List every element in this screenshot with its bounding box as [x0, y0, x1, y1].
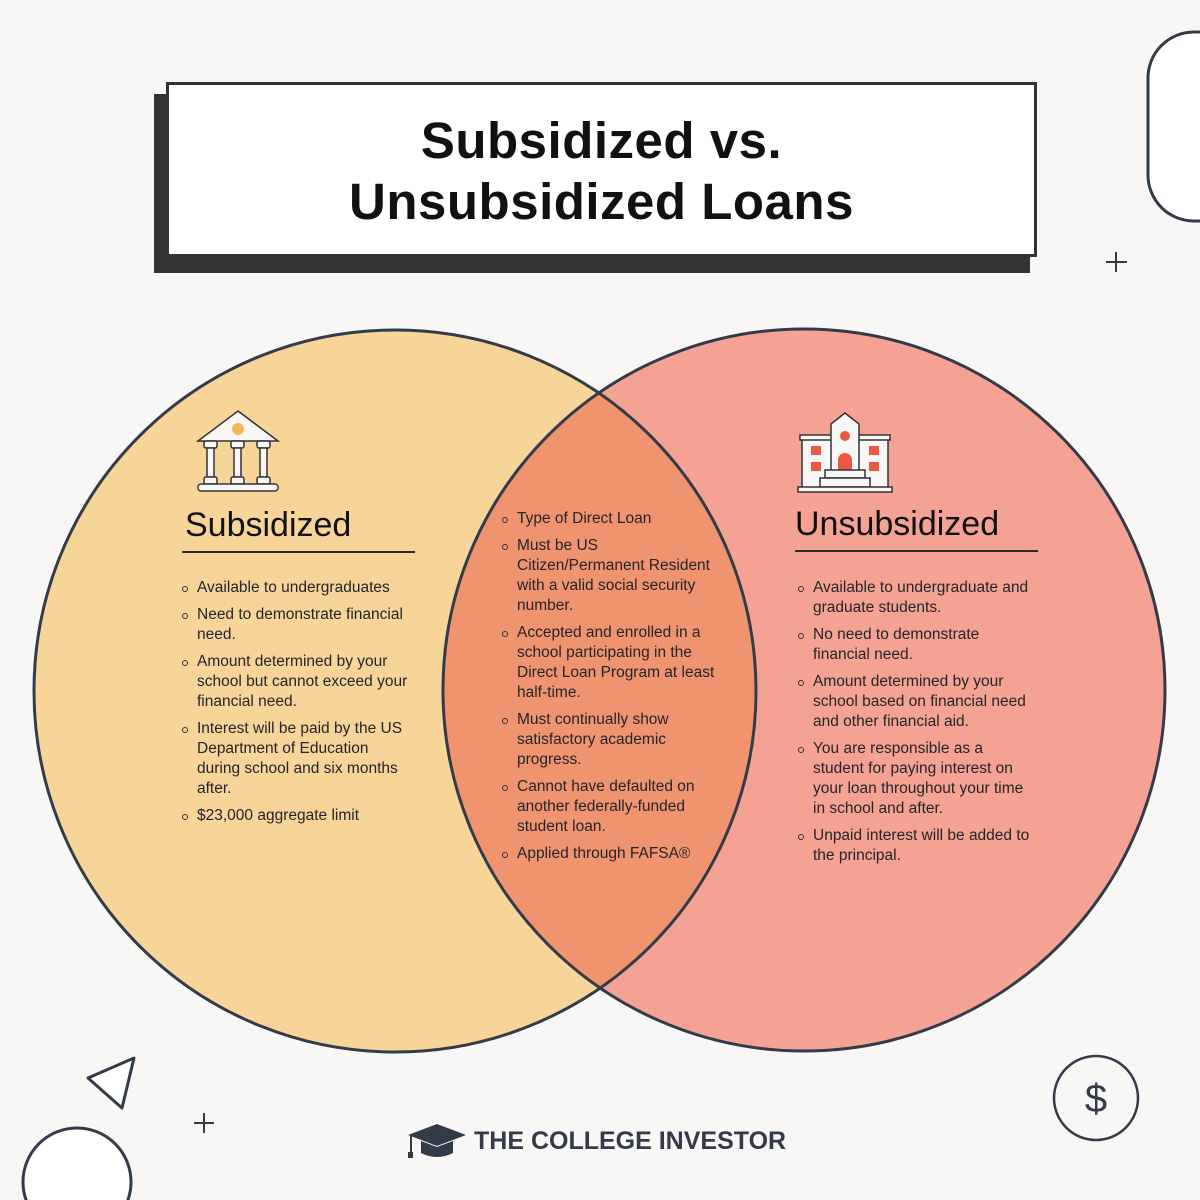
list: both: Must be US — [517, 537, 598, 554]
list: unsubsidized: school based on financial need — [813, 693, 1026, 710]
list: both: Must continually show — [517, 711, 669, 728]
heading: unsubsidized — [795, 505, 1038, 552]
list: both: student loan. — [517, 818, 606, 835]
list: both: half-time. — [517, 684, 581, 701]
decoration: circle bottom-left — [23, 1128, 131, 1200]
venn: overlap — [444, 395, 754, 986]
list: both: Citizen/Permanent Resident — [517, 557, 710, 574]
list: both: Cannot have defaulted on — [517, 778, 695, 795]
list: unsubsidized: graduate students. — [813, 599, 941, 616]
list: subsidized: need. — [197, 626, 236, 643]
list: subsidized: Need to demonstrate financial — [197, 606, 403, 623]
list: unsubsidized: and other financial aid. — [813, 713, 969, 730]
list: both: school participating in the — [517, 644, 692, 661]
list: unsubsidized: your loan throughout your time — [813, 780, 1023, 797]
list: subsidized: during school and six months — [197, 760, 398, 777]
heading: unsubsidized: Unsubsidized — [795, 505, 999, 543]
list: both — [502, 510, 714, 862]
icon: school — [798, 413, 892, 492]
heading: subsidized: Subsidized — [185, 506, 351, 544]
list: subsidized: school but cannot exceed your — [197, 673, 407, 690]
logo text: THE COLLEGE INVESTOR — [474, 1127, 786, 1155]
title box — [154, 94, 1030, 273]
logo: graduation cap — [408, 1124, 466, 1158]
list: both: Direct Loan Program at least — [517, 664, 714, 681]
list: both: another federally-funded — [517, 798, 685, 815]
venn: left circle — [34, 330, 756, 1052]
heading: subsidized — [182, 506, 415, 553]
list: both: Accepted and enrolled in a — [517, 624, 701, 641]
list: both: number. — [517, 597, 573, 614]
list: subsidized: Amount determined by your — [197, 653, 387, 670]
list: subsidized: Department of Education — [197, 740, 368, 757]
list: unsubsidized: Unpaid interest will be added to — [813, 827, 1029, 844]
list: subsidized: after. — [197, 780, 231, 797]
decoration: plus top — [1106, 252, 1127, 272]
decoration: triangle — [88, 1058, 134, 1108]
list: unsubsidized: Amount determined by your — [813, 673, 1003, 690]
venn: right circle — [443, 329, 1165, 1051]
decoration: pill — [1148, 32, 1200, 221]
list: subsidized — [182, 579, 408, 824]
decoration: plus bottom — [194, 1113, 214, 1133]
list: unsubsidized: in school and after. — [813, 800, 943, 817]
icon: dollar coin: $ — [1085, 1077, 1107, 1121]
list: subsidized: Interest will be paid by the US — [197, 720, 402, 737]
list: unsubsidized — [798, 579, 1029, 864]
icon: dollar coin — [1054, 1056, 1138, 1140]
icon: bank — [198, 411, 278, 491]
list: unsubsidized: the principal. — [813, 847, 901, 864]
list: both: Applied through FAFSA® — [517, 845, 690, 862]
list: subsidized: Available to undergraduates — [197, 579, 390, 596]
list: unsubsidized: You are responsible as a — [813, 740, 983, 757]
list: subsidized: $23,000 aggregate limit — [197, 807, 359, 824]
list: both: Type of Direct Loan — [517, 510, 651, 527]
list: both: satisfactory academic — [517, 731, 666, 748]
list: unsubsidized: No need to demonstrate — [813, 626, 979, 643]
list: unsubsidized: student for paying interest on — [813, 760, 1013, 777]
list: subsidized: financial need. — [197, 693, 297, 710]
list: unsubsidized: financial need. — [813, 646, 913, 663]
list: unsubsidized: Available to undergraduate and — [813, 579, 1028, 596]
title — [349, 112, 854, 230]
title: Subsidized vs. — [421, 112, 782, 169]
list: both: progress. — [517, 751, 582, 768]
title: Unsubsidized Loans — [349, 173, 854, 230]
list: both: with a valid social security — [517, 577, 695, 594]
